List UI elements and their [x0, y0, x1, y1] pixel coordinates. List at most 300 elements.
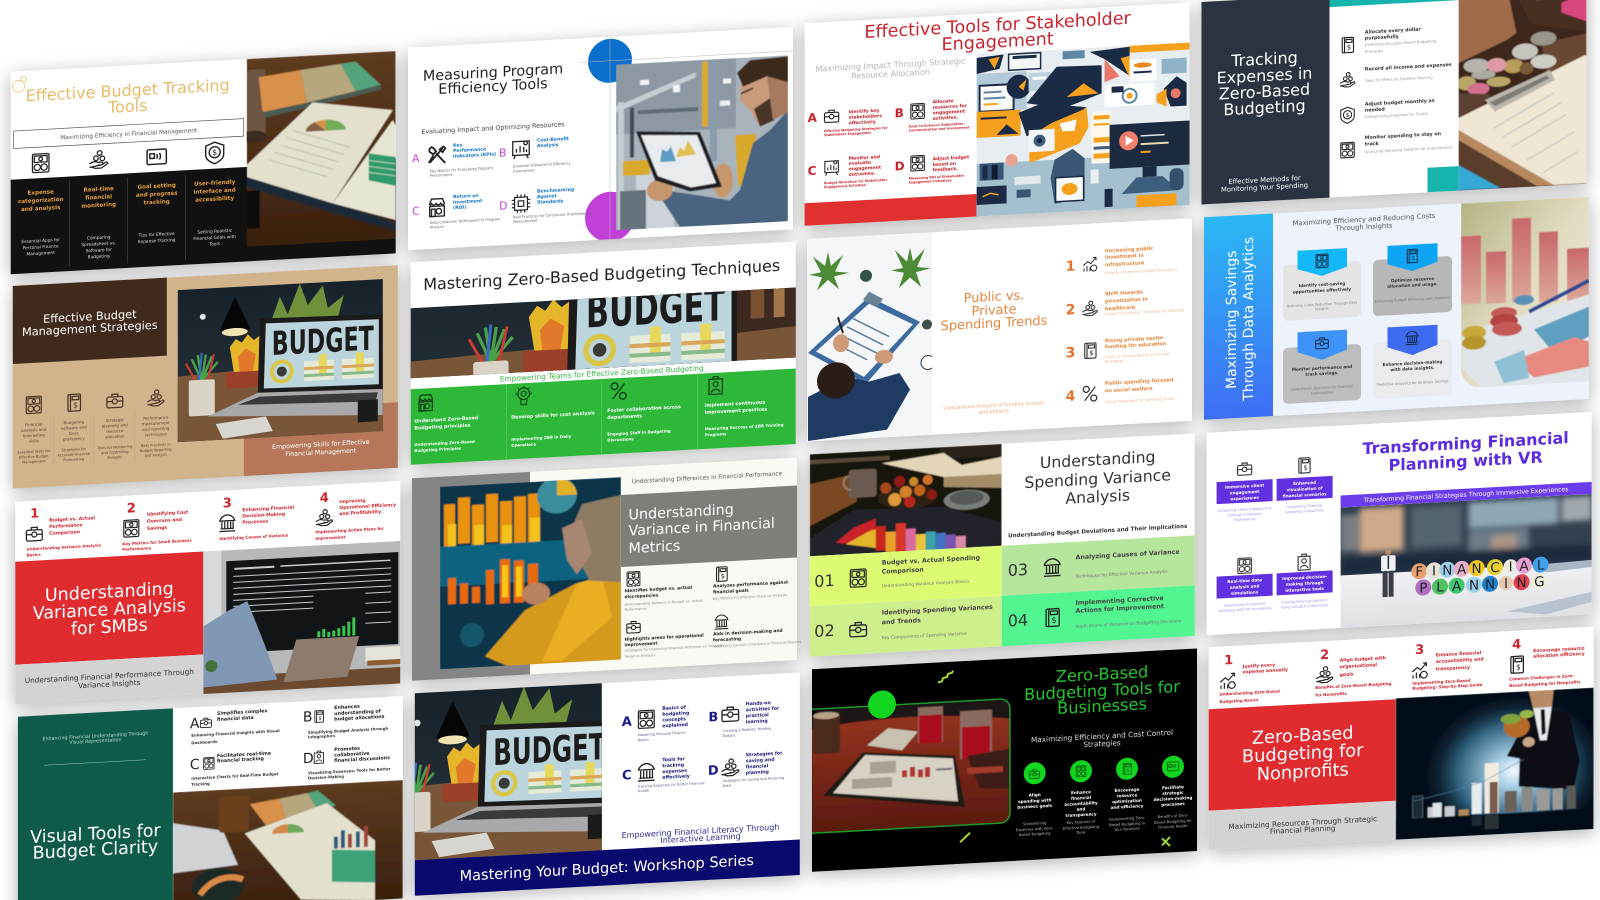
item B: activities. [933, 115, 958, 122]
column text [18, 414, 172, 465]
item B [303, 702, 388, 740]
column notes: Key Features of [1067, 819, 1096, 825]
item text: explained [662, 722, 688, 729]
column text: allocation [105, 433, 125, 440]
photo: ledger and glass [172, 780, 403, 900]
icons [419, 375, 722, 411]
item A: effectively [849, 119, 876, 127]
red title block: Zero-Based [1252, 722, 1354, 749]
item text: Public spending focused [1105, 377, 1174, 387]
grey footer: Variance Insights [78, 678, 141, 690]
icons [627, 567, 728, 634]
title: Transforming Financial [1362, 428, 1569, 458]
item text: Encourage resource [1533, 646, 1585, 654]
item text: Rising private sector [1105, 335, 1164, 344]
item A: Dashboards [191, 739, 218, 745]
panel: Transforming Financial Planning with VR [1207, 412, 1592, 636]
card 1: Identify cost-saving [1299, 281, 1345, 288]
column headings: Goal setting [137, 183, 176, 191]
item text: Aids in decision-making and [713, 628, 783, 638]
box text: simulations [1231, 589, 1259, 596]
item C: Engagement Activities [824, 183, 866, 189]
item B: B [499, 146, 507, 160]
item A: A [412, 152, 420, 165]
item B: Assessment [513, 168, 535, 174]
red title block: for SMBs [71, 616, 148, 640]
item text: Allocate every dollar [1365, 27, 1421, 36]
item C: Investment [453, 198, 483, 206]
column notes: Implementing Zero- [1109, 816, 1146, 822]
icons [638, 706, 739, 781]
column headings: Real-time [84, 186, 114, 194]
column text [1017, 784, 1192, 821]
item A: Enhancing Financial Insights with Visual [191, 728, 280, 738]
item A [190, 708, 280, 745]
subtitle box [14, 119, 244, 149]
item A: Stakeholder Engagement [824, 131, 871, 137]
item A: financial data [217, 715, 254, 723]
item text [1242, 644, 1585, 684]
column notes: Budgeting [88, 253, 110, 260]
item C: Interactive Charts for Real-Time Budget [191, 771, 278, 781]
item text: Savings [147, 525, 167, 532]
title block: Effective Budget [43, 308, 137, 326]
block 02: Key Components of Spending Variance [882, 631, 967, 641]
item text: Implementing Action Plans for [315, 526, 384, 534]
column text: and efficiency [1111, 803, 1144, 810]
column text: improvement practices [705, 407, 767, 416]
green side panel: Enhancing Financial Understanding Through [42, 731, 148, 742]
item text: Basics of [662, 705, 687, 712]
photo: reviewing document from above [807, 232, 932, 442]
item notes [1364, 37, 1453, 154]
item D: Benchmarking [537, 187, 574, 195]
item notes: Debt [723, 784, 732, 788]
card 1: opportunities effectively [1293, 286, 1351, 294]
card 3 [1283, 329, 1361, 404]
green side panel [18, 708, 173, 900]
column text: skills [29, 438, 39, 444]
item text: Highlights areas for operational [625, 633, 704, 643]
item notes: Health [638, 789, 649, 793]
photo: BUDGET laptop crop [410, 278, 796, 378]
item text: discrepancies [625, 592, 659, 600]
red title block: Variance Analysis [33, 596, 186, 624]
block 04: 04 [1008, 610, 1028, 631]
column notes: Expense Tracking [138, 237, 176, 245]
item B: understanding of [334, 709, 382, 717]
photo: table with fruit bowl and chart [810, 444, 1002, 556]
grey footer: Understanding Financial Performance Through [25, 667, 194, 685]
block 01: 01 [814, 571, 835, 591]
letters: D [708, 763, 719, 779]
column text: optimization [1112, 798, 1142, 804]
item notes: Principles [1365, 48, 1383, 54]
item notes: Future Projections for Spending Trends [1105, 397, 1174, 404]
item text: organizational [1340, 662, 1377, 670]
box text: Enhanced [1293, 480, 1316, 486]
item notes: Budgeting: Step-by-Step Guide [1412, 682, 1483, 691]
panel: Zero-Based Budgeting for Nonprofits [1209, 626, 1600, 867]
item notes: Understanding Zero-Based Budgeting [1365, 38, 1437, 47]
item text: Enhancing Financial [242, 505, 295, 513]
item text: Improving [339, 498, 366, 505]
item text: practical [746, 712, 769, 719]
item notes: Understanding Zero-Based [1219, 688, 1280, 697]
panel: Visual Tools for Budget Clarity [18, 696, 403, 900]
FINANCIAL PLANNING letters [1415, 557, 1545, 597]
item D: collaborative [334, 751, 370, 759]
item B: Essential Software for Efficiency [513, 161, 571, 169]
item text: Performance [49, 522, 82, 530]
red title block [15, 552, 203, 665]
item text: Hands-on [746, 700, 771, 707]
item D: Decision-Making [308, 774, 344, 781]
item D: Adjust budget [933, 154, 970, 162]
red title block: Nonprofits [1257, 759, 1349, 785]
item text: Performance [122, 545, 151, 552]
item notes: Tracking Expenses for Better Financial [637, 781, 705, 789]
icons [1340, 37, 1355, 158]
item notes [637, 725, 784, 793]
box text: making through [1286, 580, 1323, 587]
item A: A [808, 111, 818, 125]
photo: BUDGET laptop: BUDGET [493, 725, 606, 774]
item C: C [190, 757, 200, 773]
item text [1365, 25, 1452, 148]
item C: Return on [453, 193, 479, 200]
block 02: 02 [814, 621, 835, 641]
block 03: Techniques for Effective Variance Analysis [1075, 569, 1168, 580]
card 3: Monitor performance and [1292, 364, 1352, 372]
title block: Understanding [629, 502, 734, 524]
grey footer: Financial Planning [1270, 823, 1336, 836]
numbers: 4 [1066, 389, 1076, 405]
item B: budget allocations [334, 714, 385, 723]
item notes: Budgeting Basics [1219, 697, 1259, 704]
column text: Measuring Success of ZBB Training [705, 422, 784, 431]
FINANCIAL PLANNING letters: PLANNING [1419, 574, 1545, 597]
item text: Improvement [315, 534, 346, 541]
card 3: track savings. [1305, 370, 1339, 377]
title block: Variance in Financial [629, 516, 775, 540]
column text: Facilitate [1162, 784, 1184, 790]
item D: Measurement [513, 219, 538, 224]
item text: Overruns and [147, 517, 182, 525]
card 2: Optimize resource [1391, 276, 1434, 283]
box notes: Strategies with VR Simulations [1218, 606, 1272, 613]
numbers: 3 [223, 496, 232, 511]
block 01: Understanding Variance Analysis Basics [882, 579, 970, 589]
item notes: Strategies for Saving and Reducing [723, 776, 784, 783]
item text: Enhance financial [1436, 650, 1482, 659]
block 02: and Trends [882, 617, 921, 626]
column notes: Personal Finance [23, 243, 59, 251]
item text: Decision-Making [242, 511, 285, 520]
green side panel: Budget Clarity [33, 837, 158, 864]
column notes: Streamlining [1023, 821, 1046, 826]
column text: Encourage [1115, 787, 1140, 793]
item B: Enhances [334, 704, 360, 711]
numbers: 1 [30, 506, 39, 522]
column text: Implement continuous [705, 400, 765, 409]
item D: D [895, 159, 905, 173]
icons [1220, 656, 1523, 689]
blue side panel: Through Data Analytics [1241, 237, 1257, 402]
column text: and Analysis [144, 453, 167, 458]
photo: ledger on desk [246, 50, 396, 247]
item notes: Categorizing Expenses for Clarity [1365, 111, 1429, 119]
item text: Processes [242, 519, 268, 526]
item text: investment in [1105, 253, 1144, 261]
box text: analysis and [1230, 583, 1259, 590]
item D [895, 153, 970, 185]
item text: Shift towards [1105, 289, 1143, 297]
block 01: Comparison [882, 567, 924, 576]
item text: Basics [26, 552, 41, 558]
item text: Identifies budget vs. actual [625, 585, 693, 594]
title: Efficiency Tools [438, 76, 548, 98]
column text: Performance [143, 415, 169, 421]
panel: Measuring Program Efficiency Tools [408, 27, 793, 253]
card 4: Predictive Analytics for Strategic Savings [1377, 379, 1449, 387]
item B: resources for [933, 103, 968, 111]
item text: Monitor spending to stay on [1365, 131, 1442, 141]
item B [499, 136, 571, 174]
block 02: Identifying Spending Variances [882, 604, 993, 617]
title: Effective Budget Tracking [26, 75, 230, 105]
column text: Understanding Zero-Based [414, 439, 475, 447]
item text: goals [1340, 671, 1354, 678]
item notes: Impact of Economic Conditions on Spending [1105, 308, 1184, 316]
item notes: Tools for Effective Expense Tracking [1364, 74, 1433, 83]
blue side panel: Maximizing Savings [1224, 250, 1240, 389]
dark side panel: Tracking [1230, 48, 1298, 70]
box notes: Training Financial Advisors [1281, 598, 1328, 605]
column text: Develop skills for cost analysis [511, 410, 595, 421]
title: Mastering Zero-Based Budgeting Techniques [423, 256, 780, 294]
item A: Identify key [849, 108, 879, 115]
column text: Engaging Staff in Budgeting [607, 428, 671, 437]
item text: Analyzes performance against [713, 579, 788, 590]
numbers [30, 491, 329, 522]
title block: Metrics [629, 538, 680, 557]
column text: and Controlling [101, 450, 129, 455]
item C: C [808, 164, 817, 178]
column notes: Tools [1075, 831, 1086, 835]
column headings: categorization [18, 197, 63, 205]
panel: Mastering Your Budget Workshop Series [258, 606, 800, 900]
item text: healthcare [1105, 305, 1136, 312]
column text: measurement [142, 420, 170, 427]
column text: forecasting [23, 432, 45, 438]
column notes: Tools [208, 241, 221, 248]
item text: purposefully [1365, 34, 1400, 42]
column text: analysis and [21, 427, 47, 433]
icons [1237, 458, 1310, 574]
subtitle: Maximizing Impact Through Strategic [816, 57, 966, 74]
item text: Record all income and expenses [1365, 62, 1452, 73]
title block [621, 486, 797, 567]
column text: and [1077, 806, 1085, 812]
item text: Increasing public [1105, 246, 1153, 254]
green accents [938, 659, 1170, 858]
column notes: Your Business [1114, 827, 1140, 832]
column notes: Financial Goals with [193, 234, 236, 242]
subtitle: Understanding Budget Deviations and Their Implications [1008, 524, 1188, 539]
green side panel: Visual Tools for [30, 821, 161, 848]
item D: Standards [537, 198, 564, 206]
title: Budgeting Tools for [1024, 677, 1180, 704]
subtitle: Evaluating Impact and Optimizing Resources [421, 120, 565, 136]
item notes: Shifts in Government Budget Allocations [1105, 267, 1178, 275]
item notes: Strategies for Improving Financial Performance Through [625, 644, 722, 653]
item notes: Key Metrics for Effective Variance Analysis [713, 593, 787, 601]
box text: financial scenarios [1283, 491, 1327, 499]
panel: Understanding Variance Analysis for SMBs [15, 481, 400, 705]
dark side panel: Expenses in [1217, 64, 1312, 88]
icons [26, 509, 332, 542]
red title block: Budgeting for [1242, 740, 1364, 768]
item B: B [895, 106, 904, 120]
column headings: and progress [136, 191, 178, 199]
panel: Tracking Expenses in Zero-Based Budgeting [1202, 0, 1586, 205]
item B: Infographics [308, 733, 336, 740]
item B: Analysis [537, 142, 559, 149]
block 01 [810, 546, 1002, 606]
block 03 [1002, 535, 1195, 596]
item notes: Creating a Realistic Monthly [723, 727, 771, 733]
column notes: Comparing [87, 234, 111, 242]
item text: Strategies for [746, 750, 783, 758]
column text: Align [1029, 792, 1041, 798]
item C [808, 154, 888, 190]
decorative circles [580, 37, 793, 240]
column headings: interface and [194, 188, 236, 196]
column headings: accessibility [195, 196, 234, 204]
box notes: Visualizing Financial [1287, 503, 1322, 509]
blue side panel [1204, 214, 1273, 420]
column text: Foster collaboration across [607, 404, 681, 414]
letters: B [708, 710, 718, 725]
column text: software and [61, 424, 87, 431]
title: Private [972, 302, 1017, 320]
teal accents [1330, 0, 1458, 198]
subtitle: Maximizing Efficiency and Reducing Costs [1293, 212, 1436, 228]
subtitle: Empowering Teams for Effective Zero-Based Budgeting [500, 363, 704, 383]
item text: learning [746, 718, 768, 725]
subtitle: Interactive Learning [660, 832, 741, 845]
purple boxes [1217, 476, 1333, 599]
column text: Best Practices in [141, 442, 171, 448]
numbers: 1 [1066, 259, 1075, 275]
item text [624, 579, 788, 648]
photo: engineer with tablet [616, 55, 788, 230]
title: Zero-Based [1056, 662, 1148, 686]
item text: planning [746, 769, 769, 776]
title: Spending Variance [1024, 465, 1171, 492]
photo: BUDGET laptop crop: BUDGET [586, 278, 725, 339]
numbers [1066, 259, 1076, 405]
card 2: allocation and usage. [1387, 281, 1438, 289]
column text: Budget Reporting [140, 447, 172, 453]
column text: and reporting [142, 426, 170, 432]
item text: Understanding Variance Analysis [26, 543, 102, 552]
item D: D [303, 751, 314, 767]
grey footer: Maximizing Resources Through Strategic [1228, 814, 1377, 831]
item C [412, 192, 501, 230]
footer: Comparative Analysis of Funding Sources [943, 400, 1045, 412]
item A [412, 140, 496, 179]
card 1: Reducing Costs Reduction Through Data [1287, 301, 1357, 308]
icons [26, 390, 164, 414]
panel: Maximizing Savings Through Data Analytics [1204, 197, 1589, 420]
item D: D [499, 199, 507, 213]
item C: evaluate [849, 160, 871, 167]
card 2 [1373, 242, 1452, 316]
column headings: monitoring [81, 202, 116, 210]
item D: Best Practices for Continuous Improvement [513, 211, 592, 220]
title: Effective Tools for Stakeholder [864, 9, 1132, 43]
box notes: Enhancing Client Engagement [1218, 506, 1272, 513]
column text: business goals [1017, 803, 1053, 810]
item C: Data Collection Techniques for Program [430, 217, 501, 225]
item text: track [1365, 141, 1380, 148]
photo: analyst at monitor [203, 541, 400, 694]
item notes [1105, 267, 1184, 404]
terracotta accent and caption: Empowering Skills for Effective [272, 439, 370, 451]
column text: Budgets [107, 455, 122, 460]
item text: Justify every [1242, 662, 1275, 670]
item B: Cost-Benefit [537, 136, 570, 144]
column text: Operations [511, 441, 537, 448]
item text: Operational Efficiency [339, 502, 396, 511]
column text: departments [607, 413, 642, 421]
column headings: financial [85, 194, 112, 202]
box text: Improved decision- [1282, 574, 1327, 581]
column text: techniques [145, 431, 167, 437]
title block [13, 278, 167, 364]
column notes: Benefits of Zero- [1158, 813, 1189, 819]
item A: stakeholders [849, 113, 882, 121]
dark side panel: Effective Methods for [1228, 174, 1301, 186]
grey footer [1209, 801, 1396, 850]
item notes: Common Challenges in Zero- [1509, 673, 1574, 682]
item notes: Basics [638, 738, 649, 742]
item B: Allocate [933, 98, 954, 105]
FINANCIAL PLANNING letters: FINANCIAL [1415, 557, 1545, 580]
item C: Analysis [430, 225, 445, 230]
title: Understanding [1040, 447, 1156, 472]
item text: improvement [625, 641, 658, 648]
item B: Communication and Involvement [909, 125, 970, 133]
subtitle: Through Insights [1335, 222, 1393, 233]
item text: saving and [746, 757, 775, 764]
image frame [812, 699, 1010, 833]
column notes: Financial Health [1158, 824, 1188, 830]
subtitle box: Maximizing Efficiency in Financial Management [60, 128, 198, 142]
letters: C [622, 768, 632, 784]
column notes: Tips for Effective [138, 231, 175, 239]
column notes [21, 228, 236, 264]
panel: Public vs. Private Spending Trends [807, 218, 1192, 442]
item text: Comparison [49, 529, 80, 537]
block 04: Implications of Variance on Budgeting Decisions [1076, 618, 1182, 630]
column text: Essential Skills for [18, 449, 51, 455]
item text: funding for education [1105, 341, 1167, 350]
block 04 [1002, 585, 1195, 646]
man figure [1381, 548, 1396, 597]
